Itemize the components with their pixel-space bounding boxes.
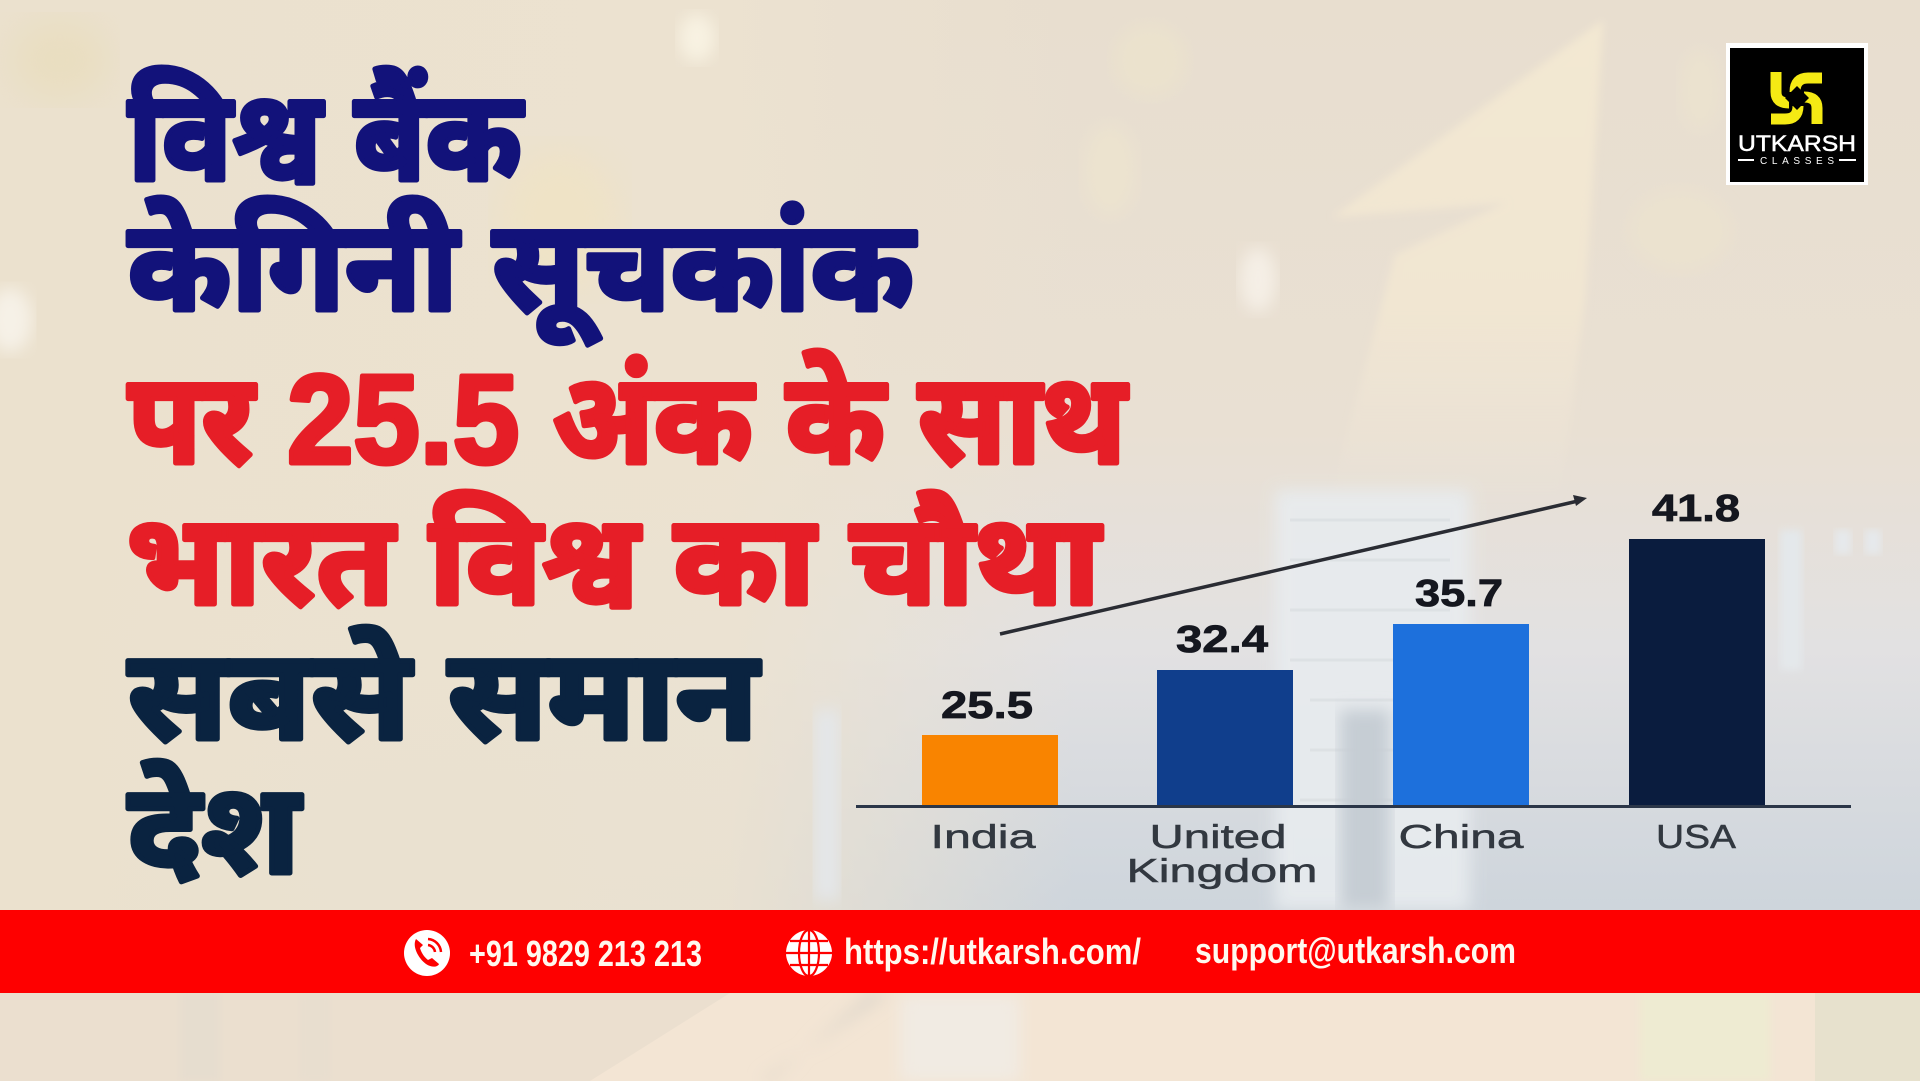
headline: पर 25.5 अंक के साथ भारत विश्व का चौथा (red) — [126, 349, 1128, 631]
headline line 4: भारत विश्व का चौथा — [126, 490, 1102, 631]
bar: United Kingdom: 32.4 — [1176, 619, 1268, 661]
trend arrow — [1000, 495, 1587, 634]
bar: China: 35.7 — [1415, 573, 1503, 615]
bar: United Kingdom: United — [1150, 818, 1286, 855]
bar: India: 25.5 — [941, 685, 1033, 727]
headline line 5: सबसे समान — [128, 625, 761, 766]
title line 1: विश्व बैंक — [128, 66, 524, 207]
bar: USA — [1629, 488, 1765, 855]
bar: United Kingdom: Kingdom — [1126, 852, 1318, 889]
bar: United Kingdom — [1126, 619, 1318, 889]
bar: China — [1393, 573, 1529, 855]
title: विश्व बैंक केगिनी सूचकांक (navy) — [128, 66, 916, 346]
bar: USA: USA — [1656, 818, 1736, 855]
contact bar — [0, 910, 1920, 993]
title line 2: केगिनी सूचकांक — [128, 196, 916, 346]
icon: yellow logo mark — [1771, 72, 1822, 124]
headline line 6: देश — [128, 759, 302, 900]
logo: Utkarsh Classes — [1726, 43, 1868, 185]
bar: China: China — [1398, 818, 1524, 855]
email: support@utkarsh.com — [1195, 930, 1516, 971]
headline line 3: पर 25.5 अंक के साथ — [128, 349, 1128, 490]
bar: USA: 41.8 — [1652, 488, 1740, 530]
bar chart — [856, 488, 1851, 889]
headline: सबसे समान देश (dark navy) — [128, 625, 761, 900]
phone number: +91 9829 213 213 — [469, 933, 702, 974]
bottom strip — [0, 993, 1920, 1081]
bar: India: India — [930, 818, 1036, 855]
icon: globe — [786, 930, 832, 976]
chart axis — [856, 805, 1851, 808]
website url: https://utkarsh.com/ — [844, 931, 1141, 972]
logo subtitle — [1738, 156, 1856, 167]
logo subtitle: CLASSES — [1760, 156, 1834, 167]
bar: India — [922, 685, 1058, 855]
logo wordmark: UTKARSH — [1738, 131, 1856, 156]
icon: phone — [404, 930, 450, 976]
